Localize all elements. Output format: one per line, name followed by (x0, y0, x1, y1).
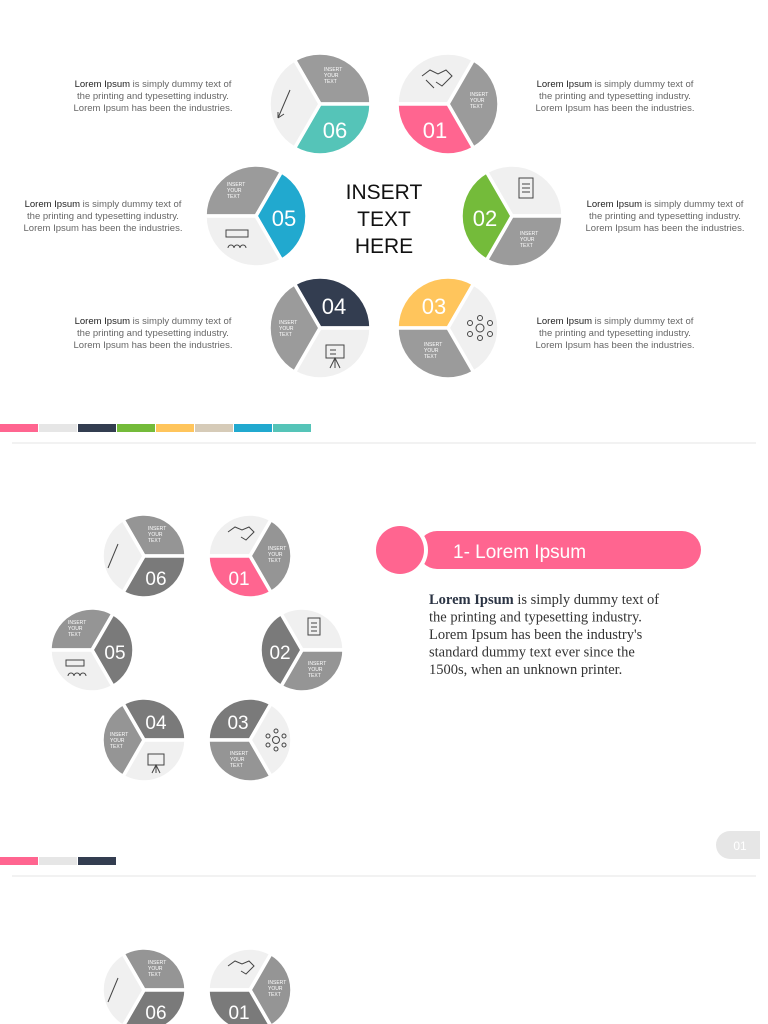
section 2 circle 05: 05 (104, 643, 126, 664)
section 2 circle 06 (102, 514, 186, 598)
section 3 circle 01: TEXT (268, 992, 281, 998)
text block 01: the printing and typesetting industry. (539, 91, 691, 102)
section 3 circle 06: 06 (145, 1003, 167, 1024)
circle 04: 04 (322, 294, 346, 319)
circle 05: INSERT (227, 182, 245, 188)
section 2 circle 03: 03 (227, 713, 249, 734)
section 2 circle 02 (260, 608, 344, 692)
circle 01: 01 (423, 118, 447, 143)
center title: INSERT (346, 181, 422, 204)
text block 02: the printing and typesetting industry. (589, 211, 741, 222)
section 3 circle 01: INSERT (268, 980, 286, 986)
section 2 circle 05: TEXT (68, 632, 81, 638)
section 2 circle 05: YOUR (68, 626, 83, 632)
section 3 circle 01: YOUR (268, 986, 283, 992)
center title (346, 181, 422, 258)
circle 01: TEXT (470, 104, 483, 110)
section 2 circle 01: 01 (228, 569, 250, 590)
text block 01: Lorem Ipsum has been the industries. (536, 103, 694, 114)
section 2 circle 02: INSERT (308, 661, 326, 667)
circle 03: TEXT (424, 354, 437, 360)
circle 01 (397, 53, 499, 155)
section 2 circle 01: INSERT (268, 546, 286, 552)
text block 04: the printing and typesetting industry. (77, 328, 229, 339)
section 2 circle 03: YOUR (230, 757, 245, 763)
section 2 circle 06: INSERT (148, 526, 166, 532)
text block 06: Lorem Ipsum is simply dummy text of (75, 79, 231, 90)
text block 02: Lorem Ipsum has been the industries. (586, 223, 744, 234)
text block 06: the printing and typesetting industry. (77, 91, 229, 102)
page number badge: 01 (733, 839, 747, 853)
circle 04: INSERT (279, 320, 297, 326)
section 2 circle 04: TEXT (110, 744, 123, 750)
section 3 circle 06 (102, 948, 186, 1024)
section 2 circle 06: YOUR (148, 532, 163, 538)
circle 05: 05 (272, 206, 296, 231)
circle 03 (397, 277, 499, 379)
text block 04: Lorem Ipsum has been the industries. (74, 340, 232, 351)
section 2 circle 01: TEXT (268, 558, 281, 564)
center title: HERE (355, 235, 413, 258)
section 2 circle 03 (208, 698, 292, 782)
circle 06: INSERT (324, 67, 342, 73)
circle 06: YOUR (324, 73, 339, 79)
text block 05: the printing and typesetting industry. (27, 211, 179, 222)
section 3 circle 01 (208, 948, 292, 1024)
section 3 circle 01: 01 (228, 1003, 250, 1024)
circle 03: YOUR (424, 348, 439, 354)
section 2 circle 02: YOUR (308, 667, 323, 673)
circle 01: YOUR (470, 98, 485, 104)
text block 03: the printing and typesetting industry. (539, 328, 691, 339)
callout paragraph: Lorem Ipsum has been the industry's (429, 627, 643, 643)
text block 04: Lorem Ipsum is simply dummy text of (75, 316, 231, 327)
circle 05 (205, 165, 307, 267)
section 2 circle 05: INSERT (68, 620, 86, 626)
callout header: 1- Lorem Ipsum: 1- Lorem Ipsum (453, 542, 586, 563)
callout header: 1- Lorem Ipsum (372, 522, 701, 578)
section 2 circle 02: 02 (269, 643, 291, 664)
color bar 2 (0, 857, 116, 865)
page number badge (716, 831, 760, 859)
text block 03: Lorem Ipsum is simply dummy text of (537, 316, 693, 327)
callout paragraph: Lorem Ipsum is simply dummy text of (429, 592, 659, 608)
text block 06: Lorem Ipsum has been the industries. (74, 103, 232, 114)
circle 02 (461, 165, 563, 267)
section 2 circle 05 (50, 608, 134, 692)
section 2 circle 03: TEXT (230, 763, 243, 769)
section 2 circle 01: YOUR (268, 552, 283, 558)
callout paragraph: the printing and typesetting industry. (429, 610, 642, 626)
circle 02: INSERT (520, 231, 538, 237)
circle 02: YOUR (520, 237, 535, 243)
center title: TEXT (357, 208, 411, 231)
section 2 circle 04: 04 (145, 713, 167, 734)
circle 03: 03 (422, 294, 446, 319)
text block 03: Lorem Ipsum has been the industries. (536, 340, 694, 351)
section 3 circle 06: INSERT (148, 960, 166, 966)
circle 06: TEXT (324, 79, 337, 85)
circle 03: INSERT (424, 342, 442, 348)
section 3 circle 06: TEXT (148, 972, 161, 978)
callout paragraph: standard dummy text ever since the (429, 644, 635, 660)
section 2 circle 04 (102, 698, 186, 782)
circle 06 (269, 53, 371, 155)
circle 01: INSERT (470, 92, 488, 98)
section 2 circle 06: 06 (145, 569, 167, 590)
color bar 1 (0, 424, 311, 432)
circle 04: YOUR (279, 326, 294, 332)
circle 05: TEXT (227, 194, 240, 200)
section 2 circle 01 (208, 514, 292, 598)
text block 05: Lorem Ipsum has been the industries. (24, 223, 182, 234)
section 2 circle 04: YOUR (110, 738, 125, 744)
callout paragraph: 1500s, when an unknown printer. (429, 662, 622, 678)
circle 04 (269, 277, 371, 379)
circle 05: YOUR (227, 188, 242, 194)
circle 06: 06 (323, 118, 347, 143)
circle 04: TEXT (279, 332, 292, 338)
section 2 circle 04: INSERT (110, 732, 128, 738)
section 3 circle 06: YOUR (148, 966, 163, 972)
circle 02: TEXT (520, 243, 533, 249)
section 2 circle 03: INSERT (230, 751, 248, 757)
section 2 circle 06: TEXT (148, 538, 161, 544)
text block 02: Lorem Ipsum is simply dummy text of (587, 199, 743, 210)
section 2 circle 02: TEXT (308, 673, 321, 679)
text block 01: Lorem Ipsum is simply dummy text of (537, 79, 693, 90)
text block 05: Lorem Ipsum is simply dummy text of (25, 199, 181, 210)
circle 02: 02 (473, 206, 497, 231)
